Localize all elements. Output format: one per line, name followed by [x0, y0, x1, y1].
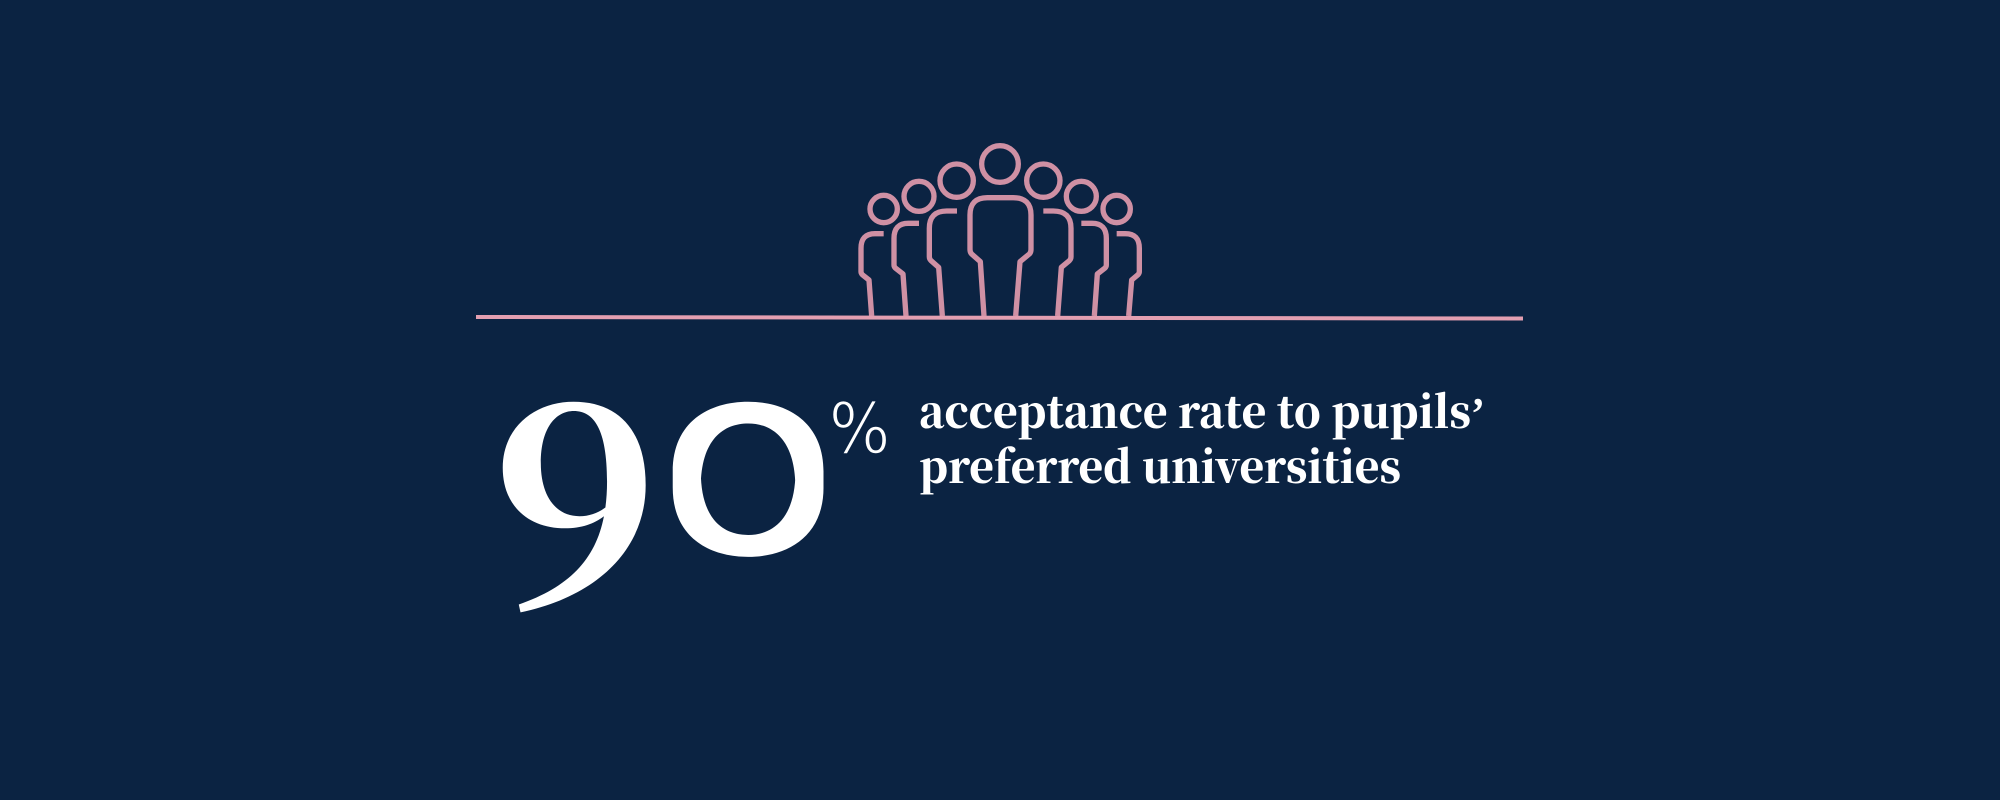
horizontal rule [476, 315, 1523, 320]
percent sign: % [829, 388, 890, 470]
statistic: 90: 0 [656, 327, 840, 600]
caption: acceptance rate to pupils’ [919, 377, 1485, 441]
caption: preferred universities [919, 432, 1401, 496]
icon: group of people [861, 146, 1139, 316]
statistic: 90: 9 [492, 282, 658, 688]
statistic: 90 [492, 282, 840, 688]
caption [919, 377, 1485, 496]
